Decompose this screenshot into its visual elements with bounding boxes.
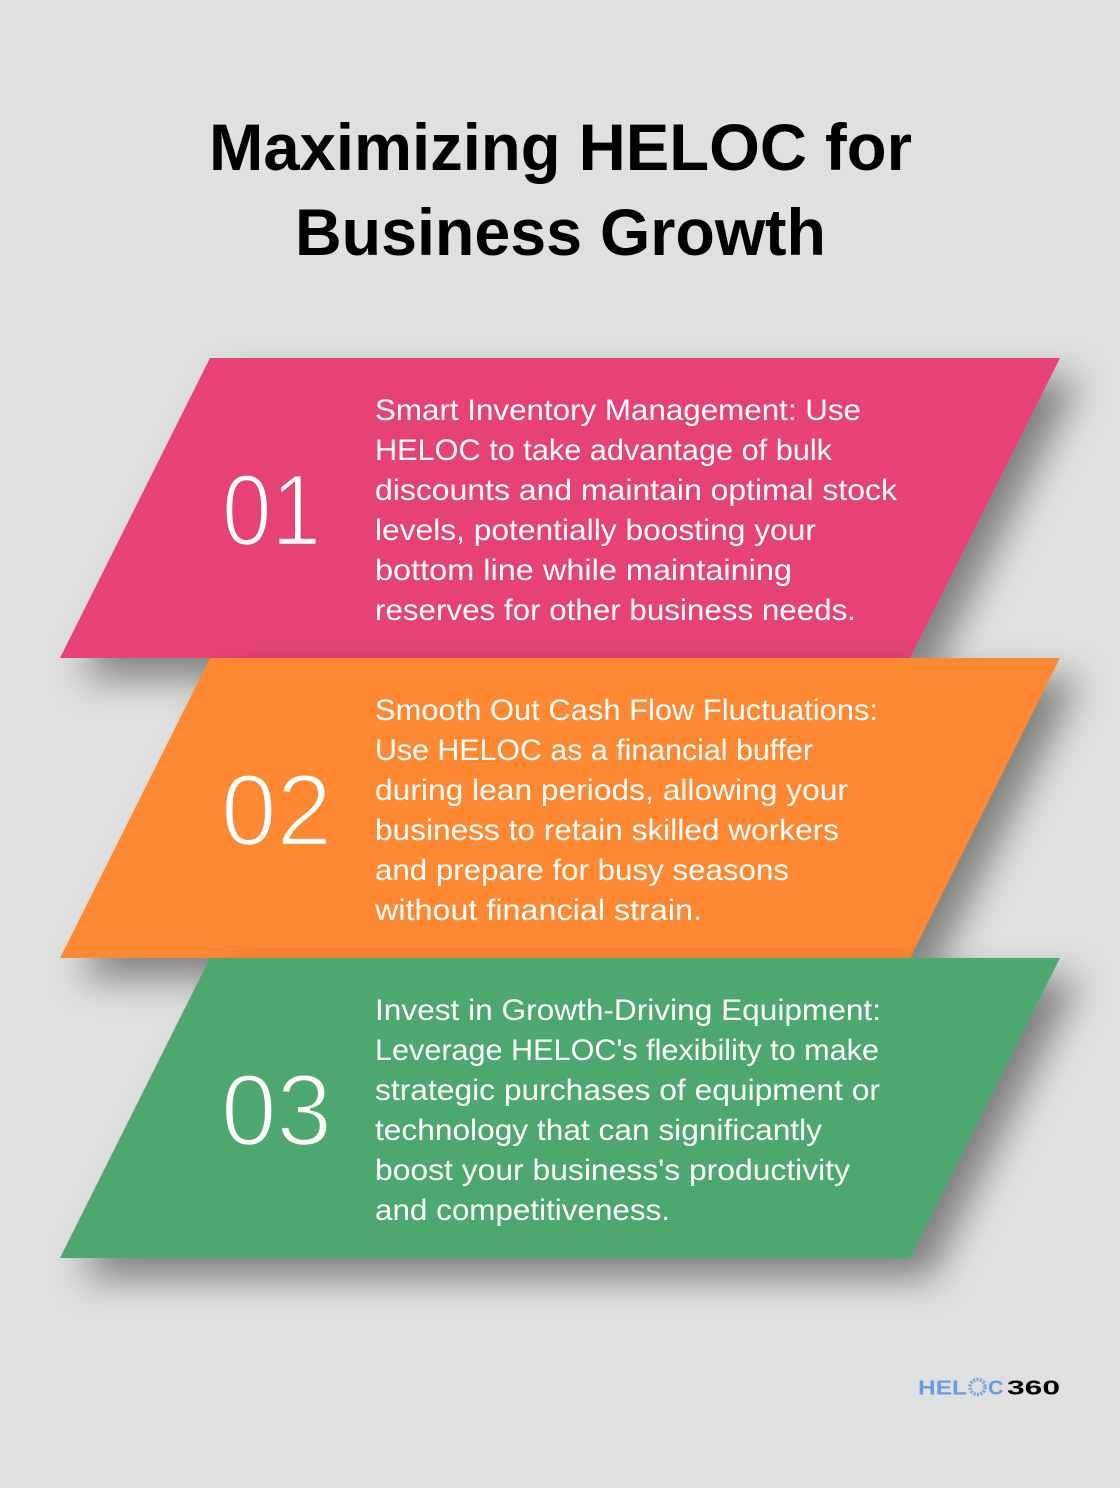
text block: step 03: strategic purchases of equipment or [375,1074,880,1107]
panel: step 01 smart inventory management [60,358,1060,658]
parallelogram: pink [60,358,1060,658]
number 02: 02 [221,755,332,867]
logo: HELOC360: 360 [1007,1378,1060,1400]
text block: step 03: boost your business's productivity [375,1154,850,1187]
parallelogram: orange [60,658,1060,958]
text block: step 02 [374,694,878,927]
text block: step 01: bottom line while maintaining [375,554,792,587]
text block: step 02: without financial strain. [374,894,702,927]
text block: step 01: reserves for other business needs. [375,594,856,627]
text block: step 01: Smart Inventory Management: Use [375,394,861,427]
text block: step 01: HELOC to take advantage of bulk [375,434,833,467]
number 03: 03 [221,1055,332,1167]
text block: step 02: business to retain skilled workers [375,814,839,847]
icon: swirl ring [970,1380,985,1394]
panel: step 02 cash flow [60,658,1060,958]
text block: step 03: technology that can significantly [375,1114,822,1147]
panel: step 03 equipment [60,958,1060,1258]
text block: step 03: Invest in Growth-Driving Equipment: [375,994,881,1027]
text block: step 03: and competitiveness. [375,1194,670,1227]
number 01: 01 [222,455,321,567]
parallelogram: green [60,958,1060,1258]
title [209,110,912,269]
title: Maximizing HELOC for [209,110,912,184]
text block: step 02: Smooth Out Cash Flow Fluctuations: [375,694,878,727]
text block: step 02: and prepare for busy seasons [375,854,789,887]
text block: step 02: during lean periods, allowing your [375,774,848,807]
text block: step 02: Use HELOC as a financial buffer [375,734,813,767]
text block: step 01: levels, potentially boosting your [375,514,816,547]
text block: step 03: Leverage HELOC's flexibility to make [375,1034,879,1067]
text block: step 01: discounts and maintain optimal stock [375,474,898,507]
logo: HELOC360: HEL [918,1378,967,1400]
title: Business Growth [295,195,826,269]
logo: HELOC360: C [988,1378,1004,1400]
text block: step 03 [375,994,881,1227]
text block: step 01 [375,394,898,627]
logo: HELOC360 [918,1378,1060,1400]
